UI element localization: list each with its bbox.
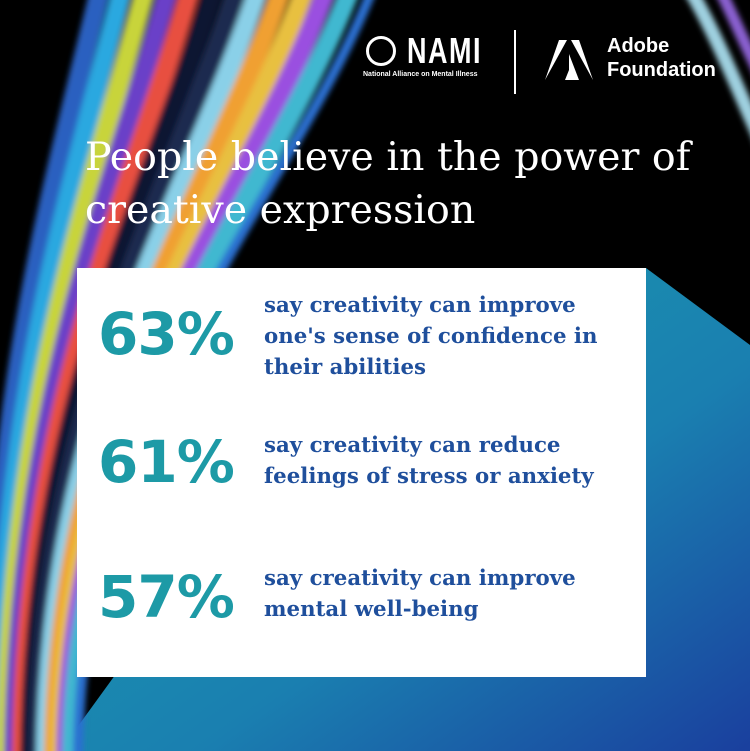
logos (363, 30, 716, 94)
nami logo: NAMI (407, 30, 482, 71)
stat 57: 57% (98, 563, 234, 631)
stat 61 (98, 428, 594, 496)
stat 57: say creativity can improve (264, 566, 576, 591)
stat 61: say creativity can reduce (264, 433, 560, 458)
nami logo (363, 30, 482, 78)
stat 57 (98, 563, 576, 631)
stat 63: 63% (98, 300, 234, 368)
stat 63: say creativity can improve (264, 293, 576, 318)
title (85, 134, 693, 233)
stat 61: 61% (98, 428, 234, 496)
teal shape (60, 268, 750, 751)
adobe logo: Adobe (607, 35, 669, 57)
nami logo: National Alliance on Mental Illness (363, 71, 478, 78)
title: People believe in the power of (85, 134, 690, 180)
stat 63: their abilities (264, 355, 426, 380)
stat 63 (98, 293, 598, 380)
adobe logo (545, 35, 716, 81)
stat 57: mental well-being (264, 597, 479, 622)
stat 63: one's sense of confidence in (264, 324, 598, 349)
stat 61: feelings of stress or anxiety (264, 464, 594, 489)
panel: stats (77, 268, 646, 677)
adobe logo: Foundation (607, 59, 716, 81)
title: creative expression (85, 187, 475, 233)
